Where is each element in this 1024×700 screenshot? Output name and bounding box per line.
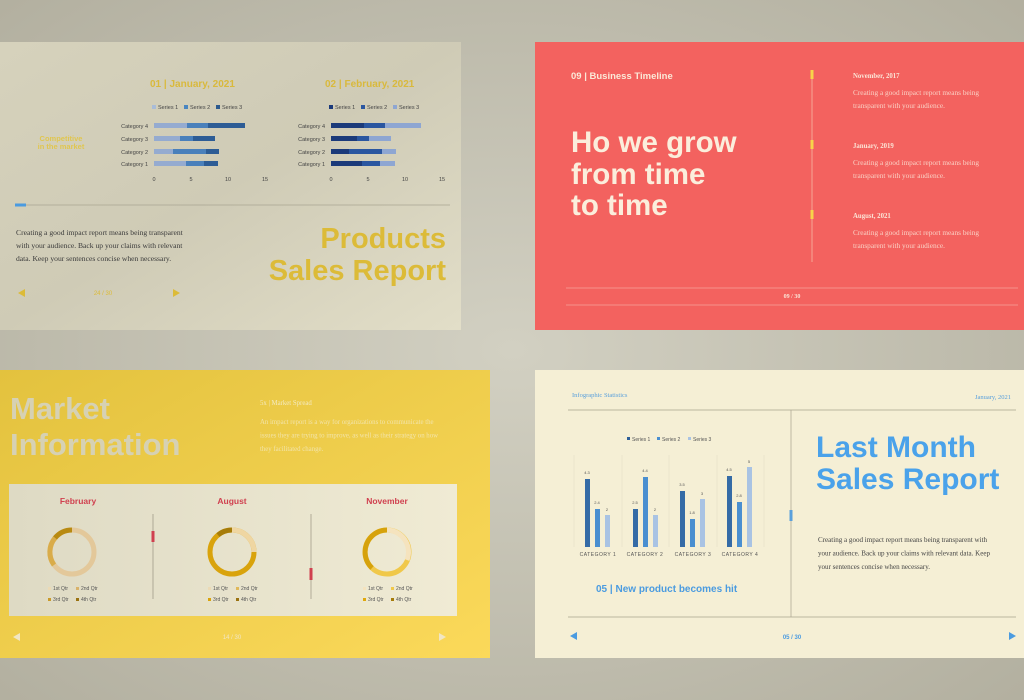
column chart: 2.4 (594, 500, 601, 505)
progress marker (15, 204, 26, 206)
legends: 1st Qtr (53, 586, 68, 592)
title: last month sales report: Last Month (816, 431, 976, 464)
bar chart: january: 0 (152, 177, 156, 183)
heading: february chart: 02 | February, 2021 (325, 79, 415, 90)
title: products sales report: Products (320, 223, 446, 255)
marker (790, 510, 792, 521)
heading: january chart: 01 | January, 2021 (150, 79, 235, 90)
panel: products sales report (0, 42, 461, 330)
legends: 1st Qtr (213, 586, 228, 592)
title: ho we grow: to time (571, 189, 668, 222)
column chart: 1.8 (689, 510, 696, 515)
navigation (13, 633, 446, 641)
text block: description: Creating a good impact report means being transparent (16, 228, 184, 237)
text block: market spread (260, 400, 438, 453)
column chart: CATEGORY 4 (722, 552, 758, 558)
bar chart: february: Category 3 (298, 137, 325, 143)
label: competitive: in the market (38, 142, 85, 151)
bar chart: february: Series 1 (335, 105, 355, 111)
column chart: Series 1 (632, 437, 651, 443)
navigation: 24 / 30 (94, 291, 113, 297)
timeline: transparent with your audience. (853, 241, 945, 250)
bar chart: january: 15 (262, 177, 268, 183)
legends (48, 586, 413, 603)
panel: market information (0, 370, 490, 658)
timeline: Creating a good impact report means being (853, 228, 979, 237)
timeline (810, 70, 979, 262)
bar chart: february: Category 2 (298, 150, 325, 156)
bar chart: february: 15 (439, 177, 445, 183)
timeline: November, 2017 (853, 73, 900, 80)
legends: 4th Qtr (81, 597, 97, 603)
bar chart: january: Category 4 (121, 124, 148, 130)
inner box: donut charts (9, 484, 457, 616)
bar chart: february: Category 4 (298, 124, 325, 130)
legends: 1st Qtr (368, 586, 383, 592)
panel: last month sales report (535, 370, 1024, 658)
title: last month sales report: Sales Report (816, 463, 999, 496)
column chart: CATEGORY 3 (675, 552, 711, 558)
column chart: 5 (748, 459, 751, 464)
navigation: 05 / 30 (783, 635, 802, 641)
bar chart: february: 0 (329, 177, 333, 183)
column chart: 2 (654, 507, 657, 512)
bar chart: february: 10 (402, 177, 408, 183)
donut: august (210, 530, 254, 574)
text block: market spread: issues they are trying to improve, as well as their strategy on how (260, 432, 438, 440)
bar chart: february: Series 3 (399, 105, 419, 111)
text block: market spread: 5x | Market Spread (260, 400, 312, 407)
bar chart: january: Category 1 (121, 162, 148, 168)
header labels: Infographic Statistics (572, 392, 628, 399)
title: market information: Information (10, 427, 180, 462)
bar chart: february (298, 105, 445, 183)
inner box: donut charts: February (60, 496, 96, 506)
column chart (574, 437, 764, 558)
bar chart: january: Category 3 (121, 137, 148, 143)
column chart: CATEGORY 2 (627, 552, 663, 558)
title: ho we grow: from time (571, 158, 705, 191)
legends: 4th Qtr (396, 597, 412, 603)
column chart: 2 (606, 507, 609, 512)
timeline: January, 2019 (853, 143, 894, 150)
legends: 3rd Qtr (213, 597, 229, 603)
bar chart: january: Series 1 (158, 105, 178, 111)
title: products sales report: Sales Report (269, 255, 446, 287)
column chart: 2.8 (736, 493, 743, 498)
donut: november (365, 530, 409, 574)
column chart: 2.5 (632, 500, 639, 505)
navigation: 14 / 30 (223, 635, 242, 641)
bar chart: february: Series 2 (367, 105, 387, 111)
bar chart: january (121, 105, 268, 183)
column chart: 3.5 (679, 482, 686, 487)
column chart: 3 (701, 491, 704, 496)
inner box: donut charts: November (366, 496, 408, 506)
inner box: donut charts: August (217, 496, 247, 506)
column chart: 4.5 (726, 467, 733, 472)
legends: 2nd Qtr (81, 586, 98, 592)
text block: description: your audience. Back up your claims with relevant data. Keep (818, 550, 990, 558)
text block: description: data. Keep your sentences concise when necessary. (16, 254, 171, 263)
caption: new product: 05 | New product becomes hit (596, 584, 738, 595)
bar chart: february: 5 (366, 177, 370, 183)
page number: 09 / 30 (784, 294, 800, 300)
timeline: transparent with your audience. (853, 171, 945, 180)
navigation (570, 632, 1016, 641)
bar chart: february: Category 1 (298, 162, 325, 168)
text block: market spread: they facilitated change. (260, 446, 324, 453)
bar chart: january: 10 (225, 177, 231, 183)
timeline: transparent with your audience. (853, 101, 945, 110)
bar chart: january: 5 (189, 177, 193, 183)
title: ho we grow: Ho we grow (571, 126, 737, 159)
timeline: Creating a good impact report means being (853, 158, 979, 167)
bar chart: january: Series 2 (190, 105, 210, 111)
column chart: 4.3 (584, 470, 591, 475)
bar chart: january: Category 2 (121, 150, 148, 156)
text block: market spread: An impact report is a way for organizations to communicate the (260, 419, 434, 426)
navigation (18, 289, 180, 297)
legends: 2nd Qtr (396, 586, 413, 592)
legends: 4th Qtr (241, 597, 257, 603)
label: competitive: Competitive (40, 134, 82, 143)
legends: 3rd Qtr (53, 597, 69, 603)
text block: description: Creating a good impact report means being transparent with (818, 536, 988, 544)
panel: last month sales report: January, 2021 (975, 394, 1011, 401)
column chart: CATEGORY 1 (580, 552, 616, 558)
column chart: 4.4 (642, 468, 649, 473)
legends: 2nd Qtr (241, 586, 258, 592)
timeline: Creating a good impact report means being (853, 88, 979, 97)
bar chart: january: Series 3 (222, 105, 242, 111)
text block: description: your sentences concise when necessary. (818, 563, 930, 571)
legends: 3rd Qtr (368, 597, 384, 603)
heading: business timeline: 09 | Business Timeline (571, 71, 673, 82)
column chart: Series 2 (662, 437, 681, 443)
panel: business timeline (535, 42, 1024, 330)
text block: description: with your audience. Back up your claims with relevant (16, 241, 183, 250)
column chart: Series 3 (693, 437, 712, 443)
donut: february (50, 530, 94, 574)
timeline: August, 2021 (853, 213, 891, 220)
title: market information: Market (10, 391, 110, 426)
